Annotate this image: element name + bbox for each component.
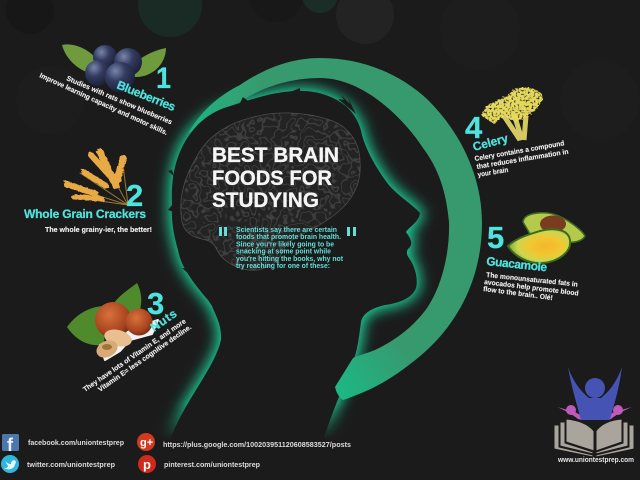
icon: twitter [1, 455, 19, 473]
icon: blueberries [62, 44, 166, 92]
brain illustration [180, 112, 361, 271]
text: blueberries: Studies with rats show blueberries [65, 75, 173, 126]
number 4: 4 [465, 110, 483, 145]
number 3: 3 [147, 286, 164, 321]
item 1: blueberries [38, 44, 178, 137]
icon: avocado [508, 213, 585, 263]
text: celery: your brain [477, 167, 509, 179]
text: celery: Celery contains a compound [474, 140, 565, 163]
intro paragraph: foods that promote brain health. [236, 232, 341, 241]
item 5: guacamole [483, 213, 585, 302]
neck fade [130, 402, 390, 480]
text: nuts: They have lots of Vitamin E, and more [82, 318, 188, 394]
icon: open book [554, 419, 634, 457]
text: nuts: Vitamin E= less cognitive decline. [97, 324, 193, 394]
icon: google plus: g+ [140, 437, 153, 449]
intro paragraph: Scientists say there are certain [236, 225, 337, 234]
item 3: nuts [67, 283, 193, 394]
quote marks [219, 227, 356, 236]
title [212, 144, 339, 212]
social links [1, 433, 351, 473]
text: guacamole: The monounsaturated fats in [486, 272, 578, 289]
logo [554, 367, 634, 464]
icon: facebook: f [7, 435, 14, 455]
text: celery [474, 140, 569, 179]
icon: pinterest [138, 455, 156, 473]
intro paragraph: try reaching for one of these: [236, 261, 330, 270]
icon: hazelnuts [67, 283, 158, 361]
icon: facebook [2, 434, 19, 455]
heading: guacamole: Guacamole [486, 254, 548, 274]
google plus url: https://plus.google.com/100203951120608583527/posts [163, 440, 351, 449]
item 4: celery [465, 87, 569, 179]
intro paragraph: snacking at some point while [236, 246, 331, 256]
head glow [168, 91, 420, 445]
head silhouette [168, 88, 420, 445]
text: guacamole: avocados help promote blood [484, 279, 579, 298]
intro paragraph: Since you're likely going to be [236, 240, 334, 248]
number 1: 1 [156, 62, 171, 95]
text: blueberries: Improve learning capacity and motor skills. [38, 72, 169, 137]
text: celery: that reduces inflammation in [476, 149, 569, 171]
intro paragraph: you're hitting the books, why not [236, 254, 344, 263]
number 2: 2 [126, 178, 143, 213]
item 2: whole grain crackers [24, 150, 152, 234]
heading: blueberries: Blueberries [115, 78, 178, 114]
green ring arc [188, 58, 482, 400]
intro paragraph [236, 225, 344, 270]
pinterest url: pinterest.com/uniontestprep [164, 460, 260, 469]
ring tail over neck [335, 342, 410, 400]
text: whole grain: The whole grainy-ier, the better! [45, 227, 152, 234]
icon: celery [482, 87, 542, 140]
title: FOODS FOR [212, 167, 332, 190]
icon: pinterest: p [143, 457, 151, 472]
text: guacamole: flow to the brain.. Olé! [483, 286, 553, 302]
heading: celery: Celery [471, 131, 510, 154]
title: STUDYING [212, 189, 319, 212]
number 5: 5 [487, 220, 504, 255]
icon: wheat [65, 150, 128, 205]
text: guacamole [483, 272, 579, 302]
twitter url: twitter.com/uniontestprep [27, 460, 115, 469]
icon: logo figures [557, 367, 632, 420]
heading: nuts: Nuts [148, 306, 180, 334]
facebook url: facebook.com/uniontestprep [28, 438, 124, 447]
title: BEST BRAIN [212, 144, 339, 167]
icon: google plus [137, 433, 155, 451]
heading: whole grain crackers: Whole Grain Crackers [24, 207, 146, 221]
